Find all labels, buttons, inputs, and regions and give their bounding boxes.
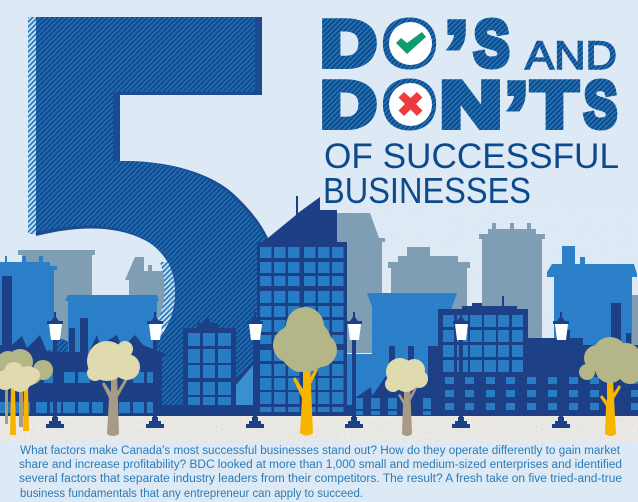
intro paragraph: What factors make Canada's most successful businesses stand out? How do they operate differently to gain market bbox=[20, 445, 621, 457]
cream tree right bbox=[385, 358, 428, 436]
title: DON'TS: S bbox=[584, 68, 617, 141]
title: DON'TS: ’ bbox=[502, 61, 532, 173]
olive tree right bbox=[579, 337, 638, 436]
icon: red cross bbox=[389, 83, 432, 126]
ground bbox=[0, 416, 638, 441]
title: DON'TS: O bbox=[383, 68, 436, 141]
lamp 2 bbox=[146, 312, 164, 428]
street lamps bbox=[46, 312, 570, 428]
title: DO'S: S bbox=[474, 7, 509, 80]
icon: green check bbox=[389, 22, 432, 65]
sky and building speckle bbox=[337, 205, 638, 410]
lamp 3 bbox=[246, 312, 264, 428]
ground speckle bbox=[0, 417, 638, 441]
subtitle line 2: BUSINESSES bbox=[323, 170, 531, 211]
intro paragraph: share and increase profitability? BDC looked at more than 1,000 small and medium-sized enterprises and identified bbox=[19, 459, 622, 471]
title: DON'TS: D bbox=[320, 68, 376, 141]
light blue sliver between buildings bbox=[236, 365, 253, 405]
subtitle line 1: OF SUCCESSFUL bbox=[324, 137, 619, 176]
title: DON'TS: N bbox=[440, 68, 502, 141]
title bbox=[320, 0, 619, 211]
lamp 4 bbox=[345, 312, 363, 428]
title: DO'S: ’ bbox=[442, 0, 472, 112]
title: DON'TS bbox=[320, 61, 617, 173]
title: DO'S: D bbox=[320, 7, 376, 80]
lamp 5 bbox=[452, 312, 470, 428]
background buildings: grey bbox=[18, 213, 638, 353]
tree centre-left bbox=[87, 341, 140, 436]
intro paragraph: several factors that separate industry leaders from their competitors. The result? A fresh take on five tried-and-true bbox=[19, 473, 622, 485]
big numeral 5 bbox=[13, 17, 268, 416]
title: AND: AND bbox=[525, 34, 617, 78]
intro paragraph bbox=[19, 445, 622, 500]
title: DON'TS: T bbox=[532, 68, 578, 141]
skyline: dark factories bbox=[0, 196, 638, 416]
olive tree centre bbox=[273, 307, 337, 436]
windows bbox=[0, 247, 638, 415]
lamp 6 bbox=[552, 312, 570, 428]
tree cluster left bbox=[0, 349, 53, 435]
title: DO'S: O bbox=[383, 7, 436, 80]
lamp 1 bbox=[46, 312, 64, 428]
intro paragraph: business fundamentals that any entrepreneur can apply to succeed. bbox=[20, 488, 363, 500]
title: DO'S bbox=[320, 0, 509, 112]
background buildings: blue bbox=[0, 246, 637, 416]
